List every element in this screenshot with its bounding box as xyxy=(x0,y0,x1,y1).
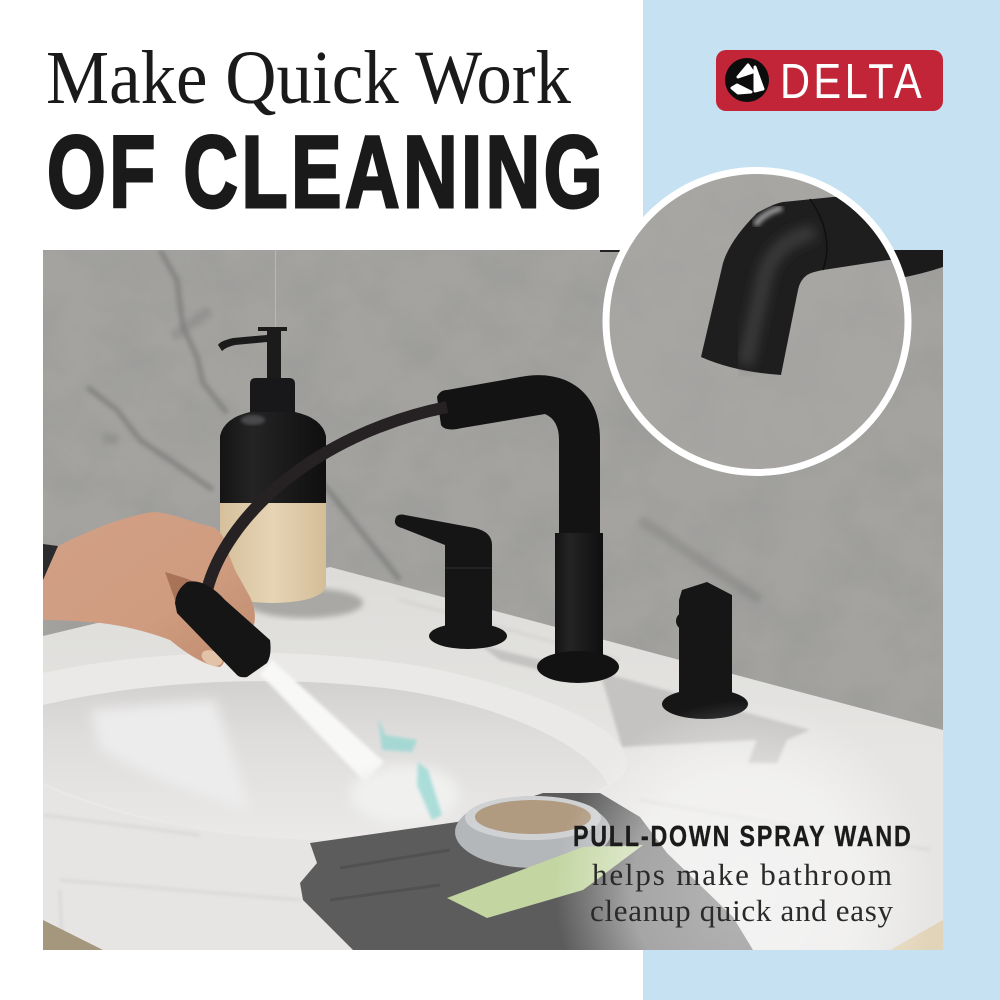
sleeve xyxy=(43,544,58,580)
soap dish xyxy=(455,796,611,868)
spout seam xyxy=(810,199,827,270)
faucet xyxy=(437,375,619,683)
shoulder highlight xyxy=(241,415,265,425)
faucet and handle shadows xyxy=(480,645,810,763)
inset ring xyxy=(606,170,908,472)
soap dispenser xyxy=(218,327,326,603)
sink xyxy=(43,653,627,840)
water stream xyxy=(260,660,384,782)
faucet base xyxy=(537,651,619,683)
photo: bathroom faucet scene xyxy=(43,250,943,950)
inset spout xyxy=(701,197,891,375)
wall hose tip xyxy=(890,250,943,278)
top edge shadow xyxy=(600,250,625,252)
wall xyxy=(43,250,943,740)
finger shadow xyxy=(165,572,215,600)
faucet body xyxy=(555,533,603,660)
caption body line 1: helps make bathroom xyxy=(592,857,892,892)
inset: spout close-up xyxy=(602,167,912,476)
logo wordmark: DELTA xyxy=(780,54,925,109)
towel xyxy=(300,793,753,950)
pump xyxy=(218,327,287,380)
collar xyxy=(250,378,295,414)
caption body line 2: cleanup quick and easy xyxy=(590,893,894,928)
counter corners xyxy=(43,920,943,950)
panel: light blue background xyxy=(643,0,1000,1000)
caption backdrop fade xyxy=(550,700,943,950)
spray hose xyxy=(207,407,447,590)
black sleeve xyxy=(220,412,326,505)
teal residue xyxy=(378,717,442,820)
icon: delta emblem xyxy=(725,58,769,102)
counter veins xyxy=(43,600,930,950)
soap packet xyxy=(447,845,643,918)
spout xyxy=(437,375,600,535)
logo badge xyxy=(716,50,943,111)
right handle xyxy=(662,582,748,719)
spout highlight xyxy=(755,208,782,225)
water splash xyxy=(350,765,460,825)
counter xyxy=(43,567,943,950)
thumb nail xyxy=(199,647,225,669)
caption heading: PULL-DOWN SPRAY WAND xyxy=(573,819,913,853)
logo: Delta xyxy=(716,50,943,111)
hand xyxy=(43,512,255,669)
spout body sheen xyxy=(745,232,815,365)
soap shadow xyxy=(247,588,363,618)
inset wall xyxy=(618,174,898,450)
spray wand xyxy=(175,581,271,677)
wood base xyxy=(220,503,326,603)
title xyxy=(46,40,606,220)
caption: pull-down spray wand xyxy=(573,819,913,928)
left handle xyxy=(395,515,507,649)
